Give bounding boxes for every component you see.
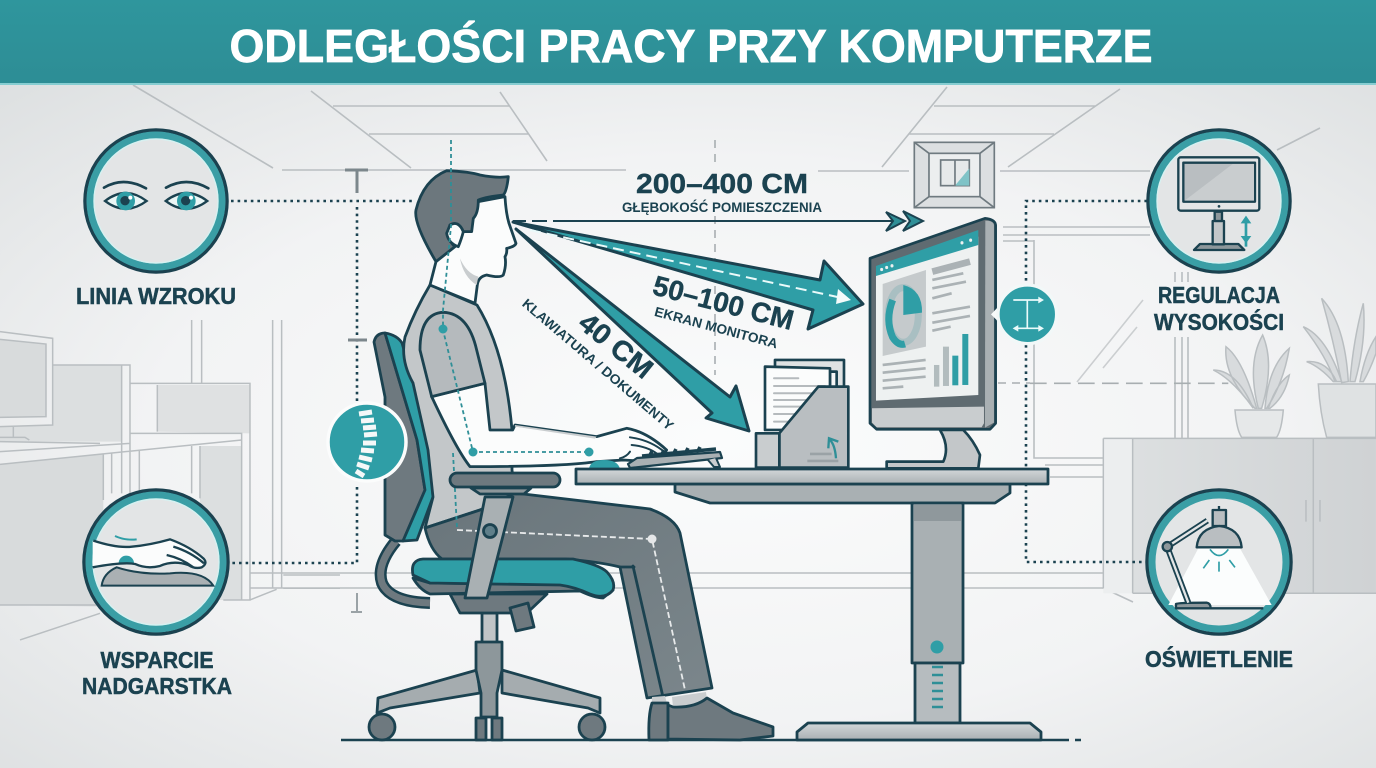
header banner [0, 0, 1376, 84]
badge inner edge [94, 139, 218, 263]
joint dot: wrist [584, 448, 594, 456]
desk leg upper [912, 503, 963, 663]
lamp surface [1176, 605, 1263, 612]
armrest pad [450, 473, 560, 487]
front paper [765, 367, 830, 430]
folder arrow icon [828, 438, 838, 458]
bar chart on screen [934, 334, 968, 387]
joint dot: knee [648, 534, 656, 544]
forearm and hand [432, 383, 667, 467]
lamp lower arm inner [1167, 547, 1188, 603]
gas cylinder [482, 613, 497, 643]
display sheen [1185, 164, 1254, 201]
lamp neck [1213, 510, 1226, 526]
forearm top shade [515, 425, 597, 439]
height arrow [1242, 220, 1250, 247]
desk leg lower [915, 663, 960, 723]
bar 4 [962, 334, 968, 385]
stand base [1194, 244, 1244, 250]
badge outer ring [1148, 130, 1290, 272]
folder label lines [807, 454, 838, 461]
leg alignment guide [457, 530, 685, 690]
panel: person [404, 140, 773, 740]
background room: ceiling and walls [133, 85, 1376, 602]
panel: line of sight [76, 130, 236, 309]
pressure point [119, 556, 134, 563]
badge arrowheads [1013, 297, 1044, 332]
wrist pad [102, 567, 213, 586]
joint dot: elbow [468, 448, 478, 456]
armrest collar [471, 488, 531, 494]
badge teal ring [89, 495, 223, 629]
desk [576, 447, 1048, 740]
eyebrows [104, 182, 208, 188]
label: monitor screen: EKRAN MONITORA [653, 304, 780, 351]
face and neck [430, 197, 516, 303]
desk base [797, 723, 1041, 740]
chair hub [476, 642, 502, 717]
chair back support inner [381, 541, 430, 603]
desk underside [675, 484, 1010, 503]
label: keyboard and documents: KLAWIATURA / DOKUMENTY [519, 296, 677, 433]
donut chart [888, 285, 922, 344]
chair leg right [502, 670, 600, 713]
desk leg collar [914, 505, 961, 521]
badge teal ring [1152, 495, 1286, 629]
panel: monitor, folder, wall window [756, 142, 996, 468]
seat pan [413, 578, 613, 598]
lamp joint [1163, 542, 1172, 551]
hand and forearm [93, 539, 205, 568]
hair [416, 171, 508, 262]
back paper [775, 360, 844, 393]
window frame [914, 142, 994, 208]
badge teal ring [1153, 135, 1285, 267]
folder front [756, 433, 779, 468]
spine badge disc [328, 403, 406, 481]
chair back support [381, 541, 430, 603]
arrow: double chevron [886, 211, 923, 231]
bar 2 [943, 347, 949, 386]
arrow: 40 cm to keyboard [516, 229, 749, 431]
chair base [369, 613, 605, 740]
chevron 2 [903, 211, 923, 231]
wheel centre [476, 718, 502, 740]
fingers [620, 437, 664, 458]
monitor frame [1178, 157, 1259, 211]
document folder [756, 360, 848, 468]
header underline [0, 83, 1376, 85]
window glass [955, 168, 969, 186]
hand outline [93, 539, 205, 568]
screen text lines [883, 262, 970, 388]
chair leg left [377, 670, 480, 713]
top distance line [513, 220, 895, 222]
badge glyph [1013, 300, 1040, 328]
lamp knob [1215, 506, 1222, 510]
eye left [105, 192, 147, 210]
trousers [425, 493, 712, 698]
badge outer ring [85, 130, 227, 272]
donut teal segment [889, 300, 905, 344]
lamp upper arm inner [1167, 521, 1207, 547]
shirt torso [404, 285, 515, 528]
ear [447, 223, 463, 247]
monitor chin [872, 407, 984, 427]
donut light segment [888, 288, 918, 342]
wheel left [369, 714, 395, 740]
chair backrest shell [374, 333, 425, 541]
lamp upper arm [1167, 521, 1207, 547]
monitor stand [887, 430, 980, 468]
badge outer ring [84, 490, 228, 634]
monitor screen header [876, 230, 978, 276]
small white arrow tip [836, 289, 851, 304]
window corners [914, 142, 994, 208]
armrest pivot [484, 524, 496, 538]
label line 2: WYSOKOŚCI [1154, 308, 1284, 335]
motion tick [115, 536, 137, 540]
arrow: 50-100 cm line of sight [513, 222, 863, 329]
badge inner edge [93, 499, 219, 625]
icon: lumbar spine badge [328, 403, 406, 481]
body alignment guide: shoulder elbow wrist [443, 140, 589, 528]
background: right cabinet and plants [1030, 298, 1376, 593]
label line 1: REGULACJA [1158, 282, 1280, 308]
joint dot: shoulder [438, 324, 448, 334]
label: 200-400 cm: 200–400 CM [636, 168, 808, 199]
keyboard [628, 447, 722, 468]
lamp bulb [1210, 549, 1228, 555]
desk top [576, 469, 1048, 484]
seat knob [510, 603, 534, 631]
panel: wrist support [82, 490, 232, 699]
label line 2: NADGARSTKA [82, 673, 232, 699]
lamp shade [1197, 526, 1242, 547]
badge pointer [991, 302, 1003, 327]
wrist pad on desk [589, 460, 620, 469]
panel: height adjustment [1148, 130, 1290, 335]
monitor display [1183, 163, 1255, 202]
dashed centre line [530, 230, 842, 298]
label: 40 cm: 40 CM [573, 307, 659, 385]
icon: wrist on pad [93, 536, 213, 586]
keyboard foot [708, 458, 720, 467]
power dot [1218, 205, 1220, 208]
wall window [914, 142, 994, 208]
shoe heel [649, 703, 668, 740]
floor line [341, 739, 1081, 741]
badge inner edge [1157, 139, 1281, 263]
keyboard body [628, 452, 722, 468]
header buttons [882, 240, 971, 270]
armrest post [465, 497, 513, 598]
chair lumbar cushion [385, 333, 433, 541]
stand neck [1215, 212, 1222, 221]
title: ODLEGŁOŚCI PRACY PRZY KOMPUTERZE [230, 20, 1152, 72]
desk adjust button [930, 640, 944, 654]
sleeve [420, 312, 485, 397]
trouser inner crease [620, 566, 663, 697]
badge disc [998, 285, 1057, 344]
paper lines [774, 378, 825, 422]
label line 1: WSPARCIE [100, 647, 214, 673]
label: LINIA WZROKU [76, 283, 236, 309]
seat cushion [412, 559, 614, 596]
icon: eyes [104, 182, 208, 210]
shoe [668, 698, 773, 740]
monitor side [985, 221, 994, 428]
badge teal ring [90, 135, 222, 267]
bar 1 [934, 365, 939, 387]
desk height scale [932, 667, 943, 707]
spine vertebrae [356, 412, 377, 476]
window pane [941, 160, 969, 186]
bar 3 [952, 356, 958, 385]
donut slice [903, 285, 922, 315]
label: OŚWIETLENIE [1145, 645, 1293, 672]
seat mechanism [450, 594, 547, 613]
badge outer ring [1147, 490, 1291, 634]
lamp base [1176, 603, 1211, 608]
stand stem [1213, 221, 1224, 244]
icon: adjustable monitor [1178, 157, 1259, 250]
icon: monitor distance badge [991, 285, 1057, 344]
lamp lower arm [1167, 547, 1188, 603]
light cone [1168, 548, 1272, 605]
wheel right [579, 714, 605, 740]
icon: desk lamp [1163, 506, 1272, 608]
arrow shape [513, 222, 863, 329]
neck shadow [460, 258, 478, 285]
background: left office desks [0, 320, 340, 640]
sock [652, 692, 707, 707]
eye right [166, 192, 207, 210]
keyboard keys [642, 447, 716, 456]
folder box [779, 387, 848, 468]
head, neck, sleeve, arm drawn in zoom coordinates [416, 171, 667, 467]
window inner [929, 153, 980, 197]
chevron 1 [886, 212, 905, 231]
panel: chair [369, 333, 605, 740]
window mullion [952, 160, 957, 186]
lamp rays [1203, 560, 1235, 572]
paper tab [830, 372, 837, 392]
height arrow heads [1241, 216, 1251, 243]
label: room depth: GŁĘBOKOŚĆ POMIESZCZENIA [622, 198, 822, 215]
label: 50-100 cm: 50–100 CM [650, 270, 797, 336]
monitor screen [876, 237, 978, 401]
panel: lighting [1145, 490, 1293, 672]
measurement guides: dotted connector lines [231, 140, 1147, 612]
monitor body [870, 218, 996, 429]
screen panel [883, 270, 926, 356]
